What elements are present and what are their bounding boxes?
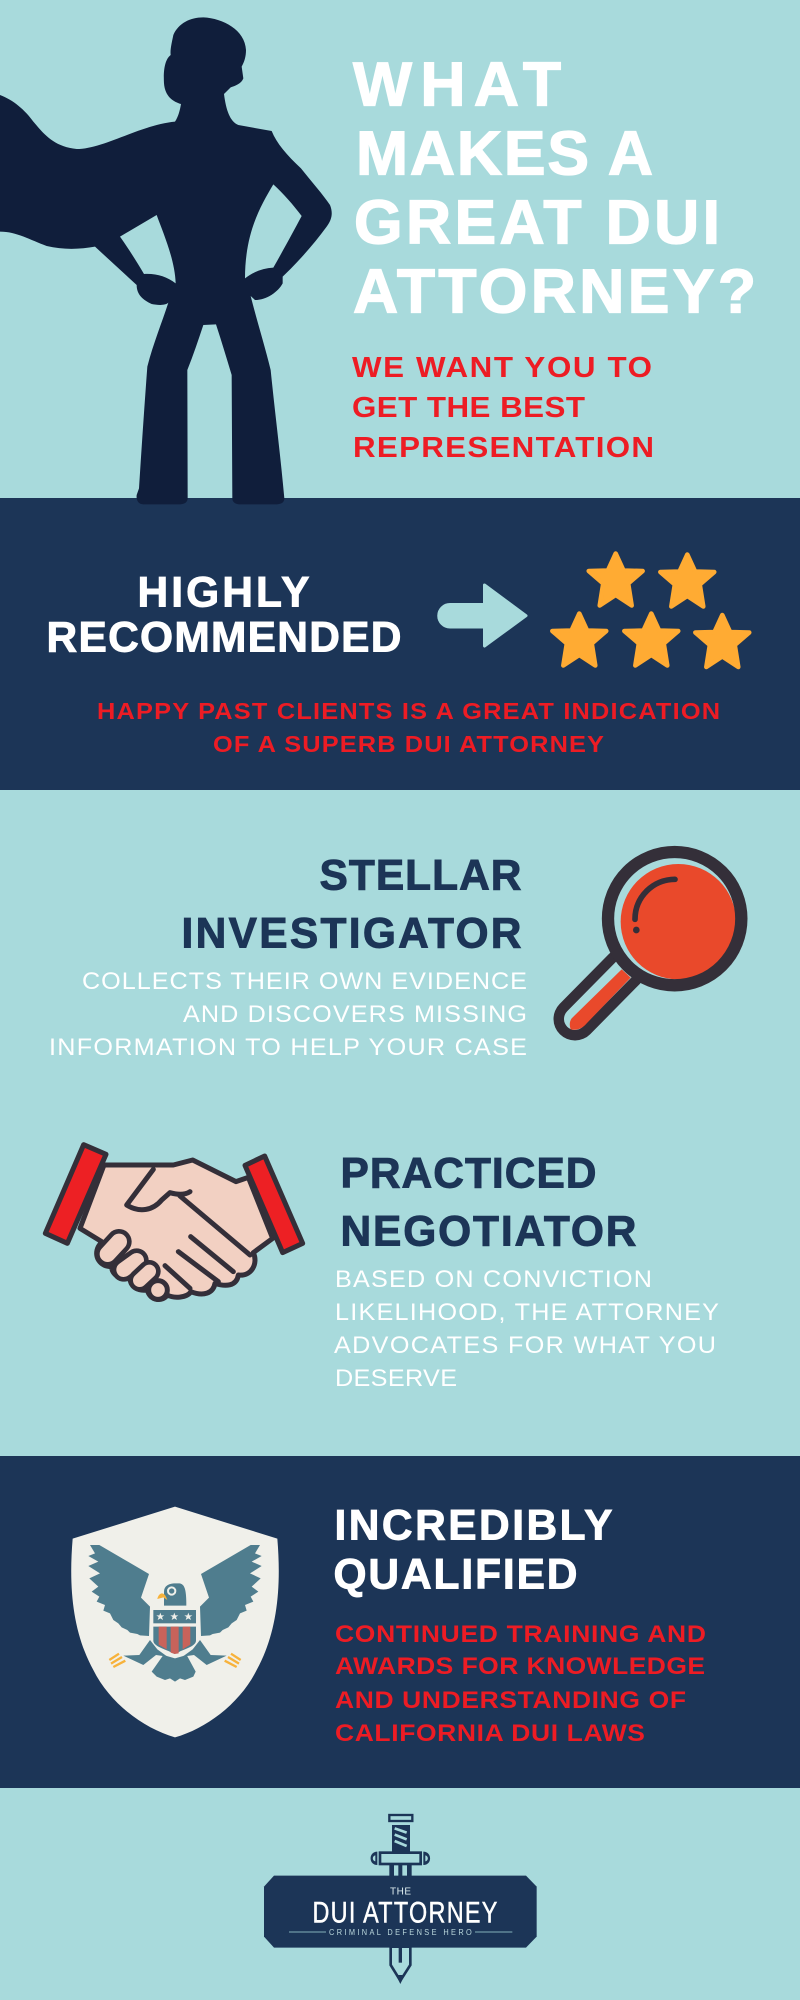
eagle tail bbox=[152, 1655, 196, 1682]
heading: stellar investigator: STELLAR bbox=[320, 852, 522, 900]
text: incredibly qualified body: CONTINUED TRAINING AND bbox=[335, 1621, 706, 1648]
title: ATTORNEY? bbox=[353, 256, 756, 326]
heading: highly recommended bbox=[46, 570, 402, 662]
text: practiced negotiator body: ADVOCATES FOR WHAT YOU bbox=[334, 1333, 716, 1359]
text: practiced negotiator body: LIKELIHOOD, THE ATTORNEY bbox=[335, 1300, 719, 1326]
icon: arrow bbox=[439, 585, 526, 646]
heading: stellar investigator: INVESTIGATOR bbox=[182, 910, 522, 958]
logo text: THE bbox=[390, 1886, 411, 1898]
text: happy past clients: HAPPY PAST CLIENTS IS A GREAT INDICATION bbox=[97, 699, 720, 725]
eagle head bbox=[164, 1583, 186, 1606]
panel: incredibly qualified band bbox=[0, 1456, 800, 1788]
eagle shield body bbox=[153, 1627, 196, 1654]
logo text bbox=[312, 1886, 497, 1937]
heading: stellar investigator bbox=[182, 852, 522, 958]
logo sword bbox=[264, 1815, 537, 1984]
eagle breast banner bbox=[153, 1610, 196, 1623]
panel: highly recommended band bbox=[0, 498, 800, 790]
eagle claws bbox=[109, 1654, 241, 1667]
text: happy past clients: OF A SUPERB DUI ATTORNEY bbox=[213, 732, 604, 758]
text: incredibly qualified body: CALIFORNIA DUI LAWS bbox=[335, 1720, 645, 1747]
subtitle: REPRESENTATION bbox=[353, 432, 654, 464]
heading: incredibly qualified bbox=[334, 1502, 612, 1598]
heading: incredibly qualified: INCREDIBLY bbox=[334, 1502, 612, 1550]
icon: magnifying glass bbox=[570, 852, 741, 1030]
text: incredibly qualified body bbox=[335, 1621, 706, 1747]
heading: practiced negotiator: NEGOTIATOR bbox=[340, 1208, 636, 1256]
text: practiced negotiator body: DESERVE bbox=[335, 1366, 457, 1392]
title: MAKES A bbox=[356, 118, 653, 188]
icon: five stars bbox=[552, 554, 749, 667]
shield bbox=[71, 1507, 279, 1737]
eagle legs bbox=[123, 1640, 227, 1665]
text: stellar investigator body: COLLECTS THEIR OWN EVIDENCE bbox=[82, 969, 527, 995]
heading: incredibly qualified: QUALIFIED bbox=[334, 1552, 578, 1598]
icon: caped hero silhouette bbox=[0, 17, 332, 504]
text: incredibly qualified body: AND UNDERSTANDING OF bbox=[335, 1687, 686, 1714]
heading: practiced negotiator: PRACTICED bbox=[340, 1150, 596, 1198]
text: incredibly qualified body: AWARDS FOR KNOWLEDGE bbox=[335, 1653, 705, 1680]
icon: handshake bbox=[45, 1145, 303, 1300]
eagle left wing bbox=[88, 1545, 150, 1636]
heading: practiced negotiator bbox=[340, 1150, 636, 1256]
icon: eagle shield bbox=[71, 1507, 279, 1737]
heading: highly recommended: HIGHLY bbox=[138, 570, 310, 616]
title: WHAT bbox=[353, 50, 561, 120]
text: practiced negotiator body: BASED ON CONVICTION bbox=[335, 1267, 652, 1293]
text: happy past clients bbox=[97, 699, 720, 758]
subtitle: GET THE BEST bbox=[352, 392, 586, 424]
logo text: CRIMINAL DEFENSE HERO bbox=[329, 1927, 472, 1937]
subtitle: WE WANT YOU TO bbox=[352, 352, 652, 384]
text: stellar investigator body: AND DISCOVERS MISSING bbox=[183, 1002, 527, 1028]
heading: highly recommended: RECOMMENDED bbox=[46, 614, 402, 662]
eagle right wing bbox=[200, 1545, 262, 1636]
subtitle bbox=[352, 352, 654, 464]
eagle beak bbox=[157, 1593, 167, 1600]
logo: the dui attorney bbox=[264, 1815, 537, 1984]
text: practiced negotiator body bbox=[334, 1267, 719, 1392]
text: stellar investigator body: INFORMATION TO HELP YOUR CASE bbox=[49, 1035, 527, 1061]
logo text: DUI ATTORNEY bbox=[312, 1896, 497, 1929]
title: GREAT DUI bbox=[354, 188, 720, 258]
text: stellar investigator body bbox=[49, 969, 527, 1061]
title bbox=[353, 50, 756, 326]
